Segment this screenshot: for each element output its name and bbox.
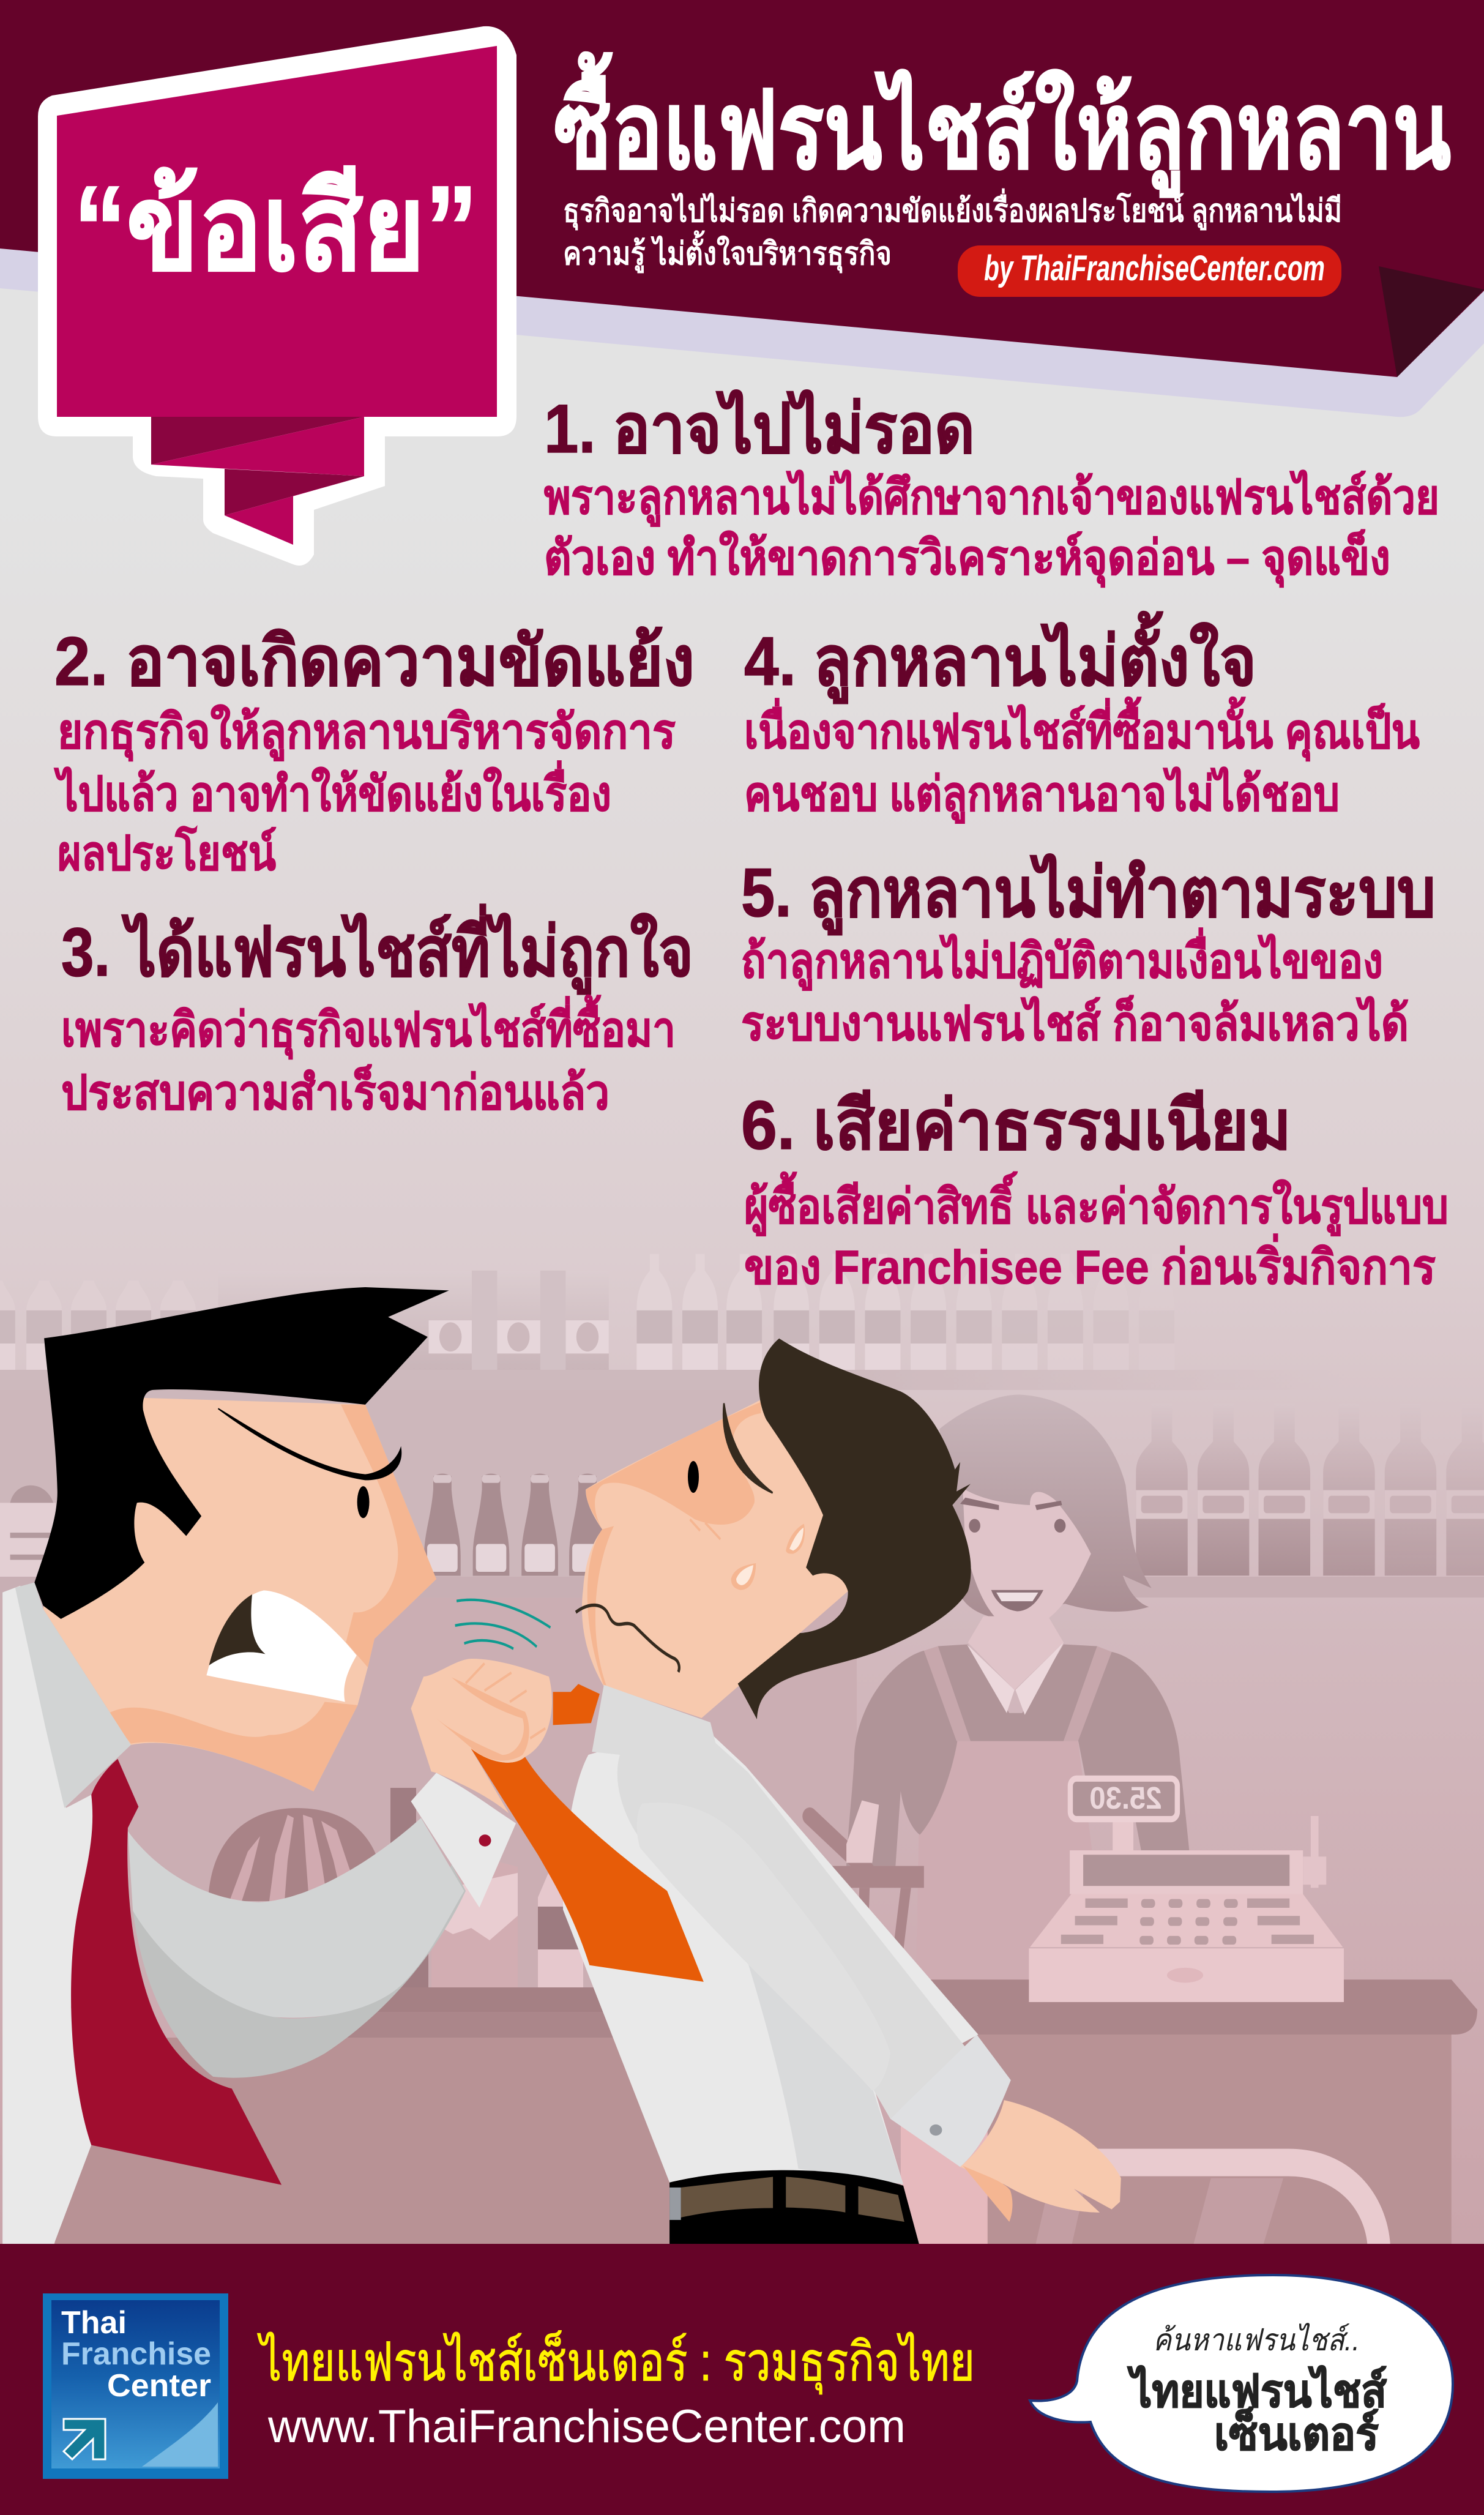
shirt arm highlight: [637, 1803, 890, 2091]
left man cuff: [411, 1773, 516, 1907]
point 3 heading: 3. ได้แฟรนไชส์ที่ไม่ถูกใจ: [61, 903, 693, 995]
point 4 heading: 4. ลูกหลานไม่ตั้งใจ: [744, 611, 1256, 704]
ribbon tail: [151, 417, 364, 545]
left man hair: [34, 1287, 449, 1619]
right man face: [582, 1400, 848, 1718]
point 6 heading: 6. เสียค่าธรรมเนียม: [741, 1087, 1291, 1164]
cashier straps: [924, 1646, 1112, 1741]
right man shirt: [563, 1685, 1121, 2247]
tie knot: [553, 1684, 600, 1725]
logo frame: [43, 2293, 228, 2479]
glass bottle: [538, 1867, 583, 1987]
point 5: [741, 854, 1436, 1050]
point 3: [61, 903, 693, 1119]
right man hair: [738, 1339, 971, 1719]
bubble shape: [1030, 2275, 1453, 2492]
side table: [772, 1804, 924, 1972]
upper shelf board: [0, 1370, 1346, 1390]
point 4: [744, 611, 1420, 824]
logo text: Franchise: [61, 2336, 211, 2372]
point 5 body: [741, 927, 1409, 1050]
cashier: [772, 1394, 1477, 2247]
bubble brand: [1127, 2364, 1387, 2459]
watermelon: [208, 1808, 386, 1901]
price display: 25.30: [1089, 1781, 1162, 1815]
logo text: Center: [107, 2368, 211, 2404]
point 6 body: ของ Franchisee Fee ก่อนเริ่มกิจการ: [744, 1233, 1436, 1294]
left man teeth: [206, 1590, 357, 1702]
floor front: [55, 2038, 851, 2246]
shirt arm: [592, 1685, 965, 2119]
counter left: [367, 1987, 857, 2012]
side flask: [846, 1801, 879, 1863]
point 1 body: ตัวเอง ทำให้ขาดการวิเคราะห์จุดอ่อน – จุดแข็ง: [544, 529, 1390, 588]
counter right: [901, 1979, 1477, 2035]
right man eyebrow: [723, 1403, 773, 1493]
logo inner: [51, 2300, 220, 2468]
point 3 body: [61, 995, 676, 1119]
right man head and hair: [576, 1339, 971, 1719]
point 2 body: ไปแล้ว อาจทำให้ขัดแย้งในเรื่อง: [54, 760, 611, 821]
subtitle: ธุรกิจอาจไปไม่รอด เกิดความขัดแย้งเรื่องผลประโยชน์ ลูกหลานไม่มี: [563, 189, 1342, 231]
point 6: [741, 1087, 1449, 1294]
right man jaw shadow: [587, 1526, 614, 1685]
register keys: [1061, 1899, 1314, 1945]
motion lines: [455, 1600, 550, 1649]
point 1 body: [544, 469, 1439, 588]
right man nose shadow: [586, 1402, 761, 1530]
point 3 body: เพราะคิดว่าธุรกิจแฟรนไชส์ที่ซื้อมา: [61, 995, 676, 1059]
point 6 body: [744, 1172, 1449, 1294]
point 5 body: ถ้าลูกหลานไม่ปฏิบัติตามเงื่อนไขของ: [741, 927, 1383, 991]
footer slogan: ไทยแฟรนไชส์เซ็นเตอร์ : รวมธุรกิจไทย: [257, 2330, 975, 2394]
speech bubble: [1030, 2275, 1453, 2492]
header: dark banner: [0, 0, 1484, 377]
cashier arms: [846, 1651, 1189, 1866]
register top: [1070, 1850, 1303, 1894]
lower wall: [0, 1598, 857, 1989]
register drawer: [1029, 1948, 1344, 2002]
left man nose shadow: [341, 1405, 436, 1667]
cashier eyes: [960, 1498, 1065, 1533]
cashier mouth: [991, 1590, 1043, 1611]
fist: [411, 1659, 552, 1814]
point 2 body: [54, 704, 676, 880]
left man head: [43, 1397, 436, 1792]
bubble small text: ค้นหาแฟรนไชส์..: [1153, 2323, 1360, 2357]
orange tie: [471, 1684, 704, 1982]
cash register: [1029, 1779, 1344, 2002]
right counter stripes: [1035, 2178, 1283, 2247]
cashier hair: [939, 1394, 1152, 1616]
price display: [1070, 1779, 1177, 1852]
subtitle: ความรู้ ไม่ตั้งใจบริหารธุรกิจ: [563, 230, 892, 274]
cashier face: [963, 1489, 1091, 1626]
ribbon badge: [38, 26, 516, 566]
right man wrinkles: [690, 1519, 720, 1539]
left man chin shadow: [108, 1702, 357, 1792]
logo swoosh: [142, 2402, 218, 2467]
belt: [669, 2177, 904, 2222]
subtitle: [563, 189, 1342, 274]
point 2 body: ผลประโยชน์: [58, 825, 277, 880]
point 4 body: คนชอบ แต่ลูกหลานอาจไม่ได้ชอบ: [744, 766, 1340, 824]
middle shelf: [0, 1577, 1484, 1598]
right man mouth: [576, 1605, 679, 1672]
register screen: [1083, 1855, 1289, 1886]
footer band: [0, 2244, 1484, 2515]
register keyboard: [1030, 1894, 1343, 1947]
logo: [43, 2293, 228, 2479]
bubble brand: เซ็นเตอร์: [1214, 2407, 1379, 2459]
left man sleeve: [128, 1818, 464, 2018]
left man eyebrow: [218, 1408, 401, 1479]
logo text: Thai: [61, 2305, 127, 2341]
cashier neck: [968, 1616, 1064, 1690]
left man collar: [15, 1582, 131, 1808]
bubble brand: ไทยแฟรนไชส์: [1127, 2364, 1387, 2416]
shirt body: [563, 1722, 979, 2184]
fist shading: [436, 1677, 529, 1761]
point 1: [544, 390, 1439, 588]
left man red tie: [71, 1759, 282, 2185]
sweat drops: [731, 1524, 805, 1590]
point 1 heading: 1. อาจไปไม่รอด: [544, 390, 975, 467]
point 3 body: ประสบความสำเร็จมาก่อนแล้ว: [61, 1064, 610, 1119]
shirt lower shade: [743, 1947, 903, 2184]
header: fold shadow: [1379, 266, 1484, 377]
grabbing hand: [411, 1659, 552, 1907]
finger lines: [466, 1664, 545, 1738]
logo arrow: [64, 2419, 105, 2459]
counter front: [901, 2035, 1452, 2247]
cashier bib: [938, 1644, 1097, 1741]
right man thumb: [963, 2166, 1012, 2222]
ketchup bottles: [0, 1474, 606, 1582]
milk carton: [431, 1855, 518, 1994]
left man eye: [357, 1486, 370, 1518]
point 2 body: ยกธุรกิจให้ลูกหลานบริหารจัดการ: [58, 704, 676, 761]
right man cuff: [890, 2035, 1011, 2167]
point 2: [54, 623, 695, 880]
cashier apron: [916, 1741, 1092, 1979]
right man: choked: [563, 1339, 1121, 2247]
right wine bottles: [1136, 1404, 1484, 1575]
point 2 heading: 2. อาจเกิดความขัดแย้ง: [54, 623, 695, 700]
point 5 body: ระบบงานแฟรนไชส์ ก็อาจล้มเหลวได้: [741, 995, 1409, 1050]
right man trousers: [669, 2170, 920, 2247]
source pill: [958, 245, 1341, 297]
mid wall: [0, 1390, 796, 1580]
scene: store background: [0, 1254, 1484, 2247]
point 4 body: [744, 697, 1420, 824]
right man hand: [960, 2100, 1121, 2213]
ribbon outline: [38, 26, 516, 566]
left man sleeve shadow: [133, 1864, 466, 2078]
logo text: [61, 2305, 211, 2404]
left man: angry: [2, 1287, 466, 2246]
cart rail: [1087, 2162, 1379, 2247]
cart panel: [901, 2122, 988, 2247]
header: lavender band: [0, 245, 1484, 417]
back bottle: [379, 1788, 428, 1989]
right man eye: [688, 1461, 699, 1493]
register lever: [1303, 1816, 1326, 1888]
ribbon face: [57, 46, 497, 417]
left man shirt: [2, 1586, 94, 2246]
ribbon word: “ข้อเสีย”: [73, 161, 478, 295]
faint top shelf bottles: [0, 1254, 1174, 1370]
footer url: www.ThaiFranchiseCenter.com: [267, 2401, 906, 2453]
tie blade: [471, 1748, 704, 1982]
source pill: by ThaiFranchiseCenter.com: [984, 249, 1325, 288]
left man mouth: [209, 1594, 266, 1665]
cashier collar: [967, 1642, 1064, 1715]
